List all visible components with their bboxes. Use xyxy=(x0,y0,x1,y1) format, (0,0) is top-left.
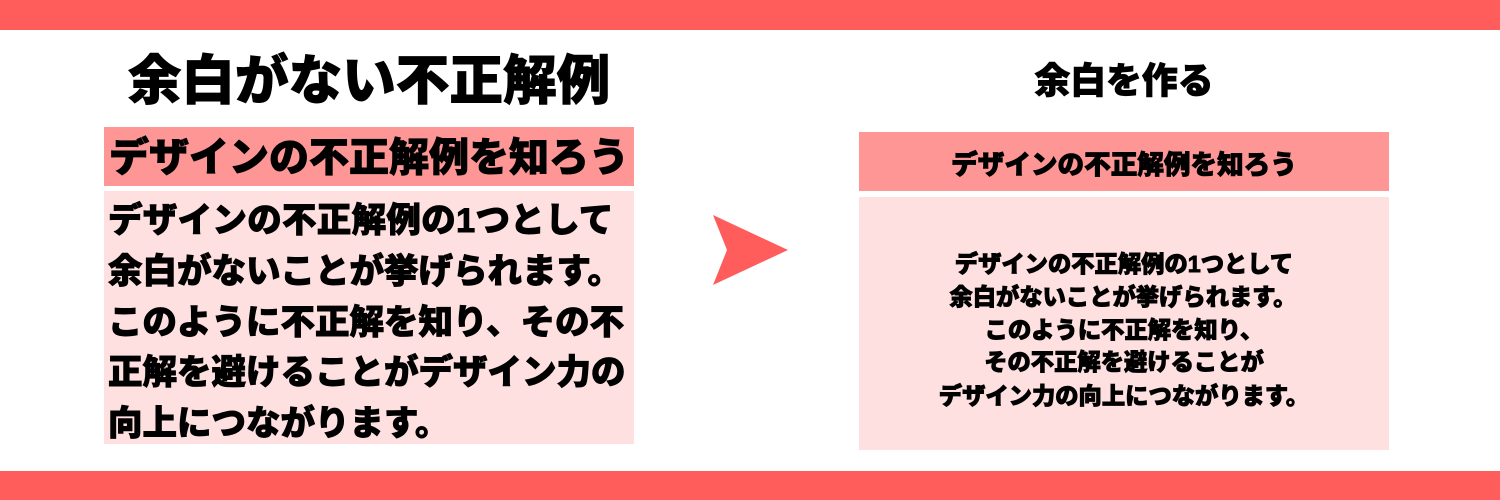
heading: bad example: 余白がない不正解例 xyxy=(128,51,610,111)
body line 4: その不正解を避けることが xyxy=(984,349,1264,375)
body line 5: 向上につながります。 xyxy=(108,405,450,443)
body line 4: 正解を避けることがデザイン力の xyxy=(108,354,626,392)
panel: bad example without whitespace xyxy=(104,51,634,444)
header bar: bad example xyxy=(104,127,634,186)
header bar: improved example xyxy=(859,132,1389,191)
panel: improved example with whitespace xyxy=(859,61,1389,450)
body line 1: デザインの不正解例の1つとして xyxy=(108,202,614,240)
body line 3: このように不正解を知り、 xyxy=(985,317,1263,343)
bottom band xyxy=(0,471,1500,500)
header bar text: デザインの不正解例を知ろう xyxy=(951,150,1297,180)
header bar text: デザインの不正解例を知ろう xyxy=(109,136,629,180)
body line 1: デザインの不正解例の1つとして xyxy=(955,251,1293,277)
text box: improved example xyxy=(859,197,1389,450)
heading: improved example: 余白を作る xyxy=(1034,61,1213,101)
body line 3: このように不正解を知り、その不 xyxy=(108,304,624,342)
body line 2: 余白がないことが挙げられます。 xyxy=(949,284,1297,310)
top band xyxy=(0,0,1500,30)
body line 5: デザイン力の向上につながります。 xyxy=(939,383,1309,409)
arrow xyxy=(713,215,788,285)
text box: bad example xyxy=(104,191,634,444)
body line 2: 余白がないことが挙げられます。 xyxy=(108,253,622,291)
